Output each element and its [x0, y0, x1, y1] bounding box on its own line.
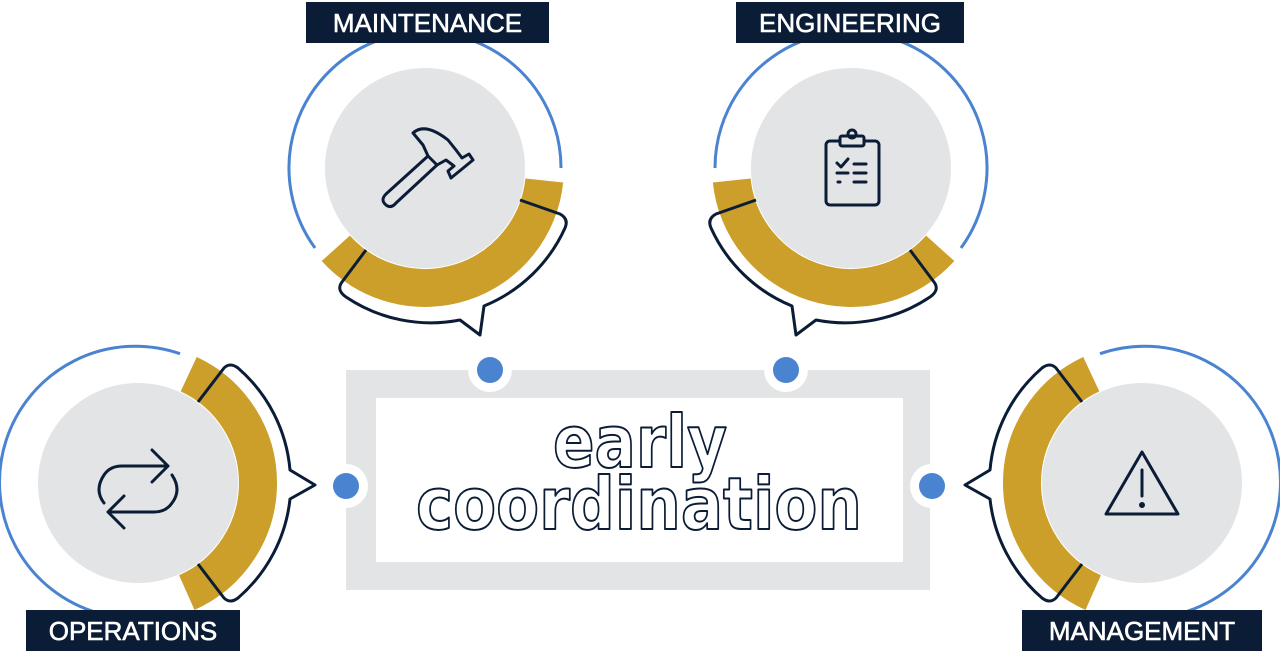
title text: early [553, 400, 727, 484]
label: operations: OPERATIONS [49, 616, 217, 646]
title text: coordination [416, 462, 862, 546]
icon: repeat arrows [99, 450, 177, 528]
icon: warning [1106, 452, 1178, 514]
label: engineering [736, 2, 964, 43]
panel: maintenance [289, 32, 566, 335]
title text [416, 400, 862, 546]
label: management [1022, 610, 1262, 651]
panel: management [965, 346, 1280, 613]
center panel [346, 370, 930, 590]
label: maintenance [306, 2, 549, 43]
label: management: MANAGEMENT [1049, 616, 1235, 646]
label: operations [26, 610, 240, 651]
icon: clipboard [826, 130, 879, 205]
connector dots [324, 348, 954, 508]
label: maintenance: MAINTENANCE [333, 8, 522, 38]
icon: hammer [383, 129, 473, 207]
label: engineering: ENGINEERING [759, 8, 941, 38]
panel: operations [0, 346, 315, 613]
panel: engineering [710, 32, 987, 335]
